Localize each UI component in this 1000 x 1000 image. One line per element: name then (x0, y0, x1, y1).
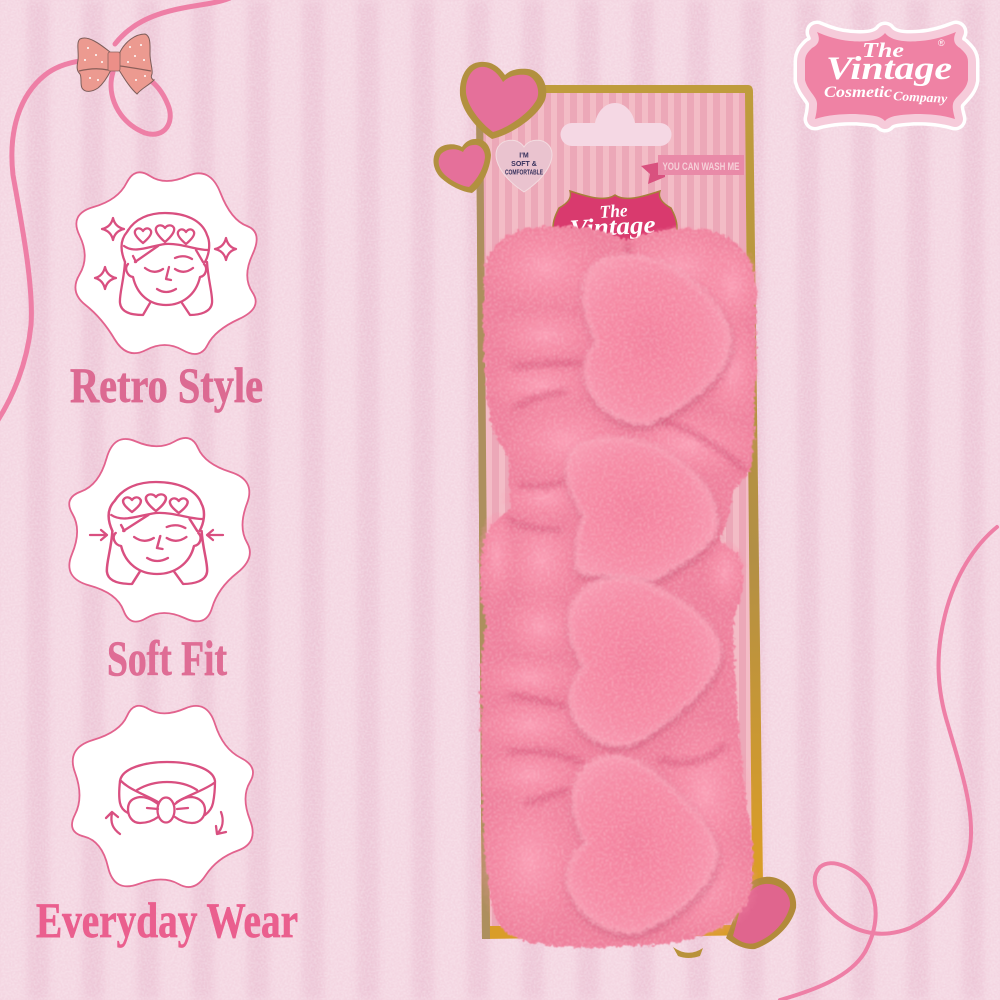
logo: The Vintage Cosmetic Company (805, 32, 968, 121)
icon: face with headband and squeeze arrows (90, 482, 223, 584)
icon: headband with bow and rotate arrows (106, 762, 226, 834)
plush heart 4 (568, 757, 718, 937)
plush heart 1 (584, 256, 731, 428)
fold shadows (510, 245, 745, 803)
logo: The Vintage Cosmetic Company: Cosmetic (824, 84, 892, 101)
badge: wavy white shape (75, 172, 257, 354)
banner: you can wash me (641, 155, 744, 184)
card logo plaque: The (599, 200, 628, 222)
banner: you can wash me: YOU CAN WASH ME (662, 161, 740, 173)
feature: soft fit (69, 438, 250, 686)
gold hearts: top left of card (434, 62, 546, 193)
plush heart 2 (567, 438, 718, 584)
card logo plaque (553, 191, 677, 250)
ribbon: top left curve (0, 0, 230, 420)
heart badge: soft and comfortable (496, 140, 552, 192)
card hang hole (560, 103, 672, 146)
band folds: soft highlights (475, 226, 762, 950)
logo: The Vintage Cosmetic Company: The (862, 38, 904, 62)
logo: The Vintage Cosmetic Company: Company (893, 88, 948, 106)
feature: everyday wear (36, 706, 298, 948)
label: everyday wear: Everyday Wear (36, 892, 298, 948)
label: soft fit: Soft Fit (107, 630, 227, 686)
feature: retro style (70, 172, 263, 413)
badge: wavy white shape (69, 438, 250, 622)
heart badge: soft and comfortable: I'M (519, 152, 529, 160)
plush heart headband (475, 226, 762, 950)
logo: The Vintage Cosmetic Company: ® (938, 38, 945, 48)
label: retro style: Retro Style (70, 357, 263, 413)
ribbon: bottom right curve (780, 527, 997, 1000)
logo: The Vintage Cosmetic Company: Vintage (826, 51, 952, 87)
product card (476, 85, 763, 939)
plush heart 3 (569, 578, 721, 750)
heart badge: soft and comfortable: COMFORTABLE (505, 170, 543, 176)
icon: face with heart headband and sparkles (95, 213, 236, 315)
badge: wavy white shape (72, 706, 253, 887)
icon: polka dot bow (77, 34, 154, 94)
heart badge: soft and comfortable: SOFT & (511, 161, 537, 168)
card logo plaque: Vintage (569, 212, 656, 243)
gold heart: bottom right of card (673, 877, 796, 958)
